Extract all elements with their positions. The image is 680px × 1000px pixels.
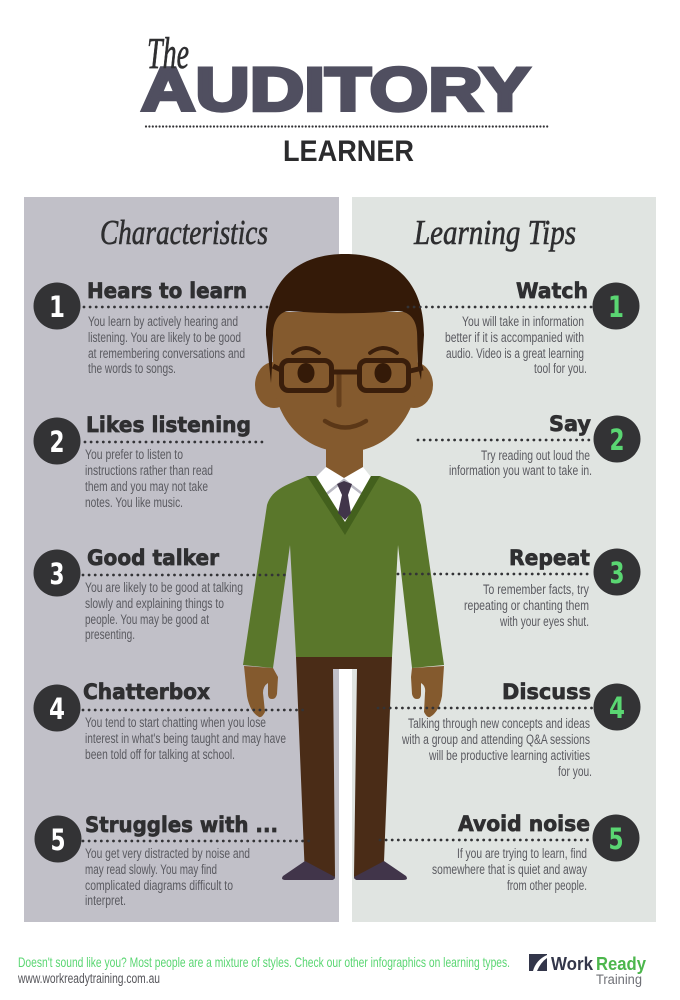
description: them and you may not take — [85, 479, 208, 494]
characteristic 2: likes listening — [34, 413, 262, 510]
description: You tend to start chatting when you lose — [85, 715, 266, 730]
heading: Good talker — [87, 546, 220, 570]
number badge 2 — [34, 418, 80, 464]
description: may read slowly. You may find — [85, 862, 217, 877]
characteristic 5: struggles with — [34, 813, 312, 908]
left ear — [255, 362, 293, 408]
heading: Say — [549, 412, 591, 436]
logo: Work Ready Training: Training — [596, 972, 642, 987]
heading: Chatterbox — [83, 680, 210, 704]
collar shadow — [324, 480, 365, 496]
number badge 3: 3 — [610, 556, 624, 590]
illustration: man with glasses — [243, 254, 444, 880]
neck — [326, 440, 363, 482]
title script word: The: The — [147, 29, 189, 78]
description: listening. You are likely to be good — [88, 330, 241, 345]
nose — [336, 374, 342, 405]
number badge 1: 1 — [608, 290, 624, 324]
number badge 4 — [34, 684, 80, 732]
number badge 3: 3 — [50, 557, 64, 591]
description: with a group and attending Q&A sessions — [401, 732, 590, 747]
footer website: www.workreadytraining.com.au — [17, 971, 160, 986]
description: presenting. — [85, 627, 135, 642]
characteristic 4: chatterbox — [34, 680, 306, 762]
description — [85, 580, 243, 642]
description: slowly and explaining things to — [85, 596, 224, 611]
heading: Struggles with ... — [85, 813, 278, 837]
number badge 5: 5 — [50, 823, 66, 857]
heading: Watch — [516, 279, 588, 303]
legs — [296, 657, 392, 880]
description: You are likely to be good at talking — [85, 580, 243, 595]
description: interest in what's being taught and may have — [85, 731, 286, 746]
description: information you want to take in. — [449, 463, 592, 478]
description: You learn by actively hearing and — [88, 314, 238, 329]
description: instructions rather than read — [85, 463, 213, 478]
description: better if it is accompanied with — [445, 330, 584, 345]
description: You will take in information — [462, 314, 584, 329]
description: at remembering conversations and — [88, 346, 245, 361]
tip 1: watch — [408, 279, 640, 376]
characteristic 1: hears to learn — [34, 279, 272, 376]
description — [85, 447, 213, 510]
title subword: LEARNER: LEARNER — [283, 135, 414, 168]
description: will be productive learning activities — [428, 748, 590, 763]
face — [273, 312, 418, 452]
title — [141, 29, 548, 168]
panel: learning tips background — [352, 197, 656, 922]
description: You get very distracted by noise and — [85, 846, 250, 861]
description: somewhere that is quiet and away — [432, 862, 587, 877]
description: from other people. — [507, 878, 587, 893]
glasses — [273, 360, 423, 390]
number badge 4: 4 — [609, 691, 625, 725]
logo: Work Ready Training: Ready — [596, 954, 646, 974]
tip 4: discuss — [378, 680, 640, 779]
number badge 1 — [592, 282, 640, 330]
heading: Likes listening — [86, 413, 251, 437]
left eye — [298, 363, 314, 383]
right shoe — [354, 861, 407, 880]
heading: Avoid noise — [458, 812, 590, 836]
tip 5: avoid noise — [380, 812, 640, 893]
description: interpret. — [85, 893, 126, 908]
right ear — [395, 362, 433, 408]
hair — [266, 254, 424, 383]
description — [445, 314, 587, 376]
description — [449, 448, 592, 478]
description: people. You may be good at — [85, 612, 209, 627]
description: repeating or chanting them — [464, 598, 589, 613]
number badge 5: 5 — [608, 822, 624, 856]
title main word: AUDITORY: AUDITORY — [141, 56, 530, 124]
number badge 5 — [34, 816, 82, 862]
description: Talking through new concepts and ideas — [408, 716, 590, 731]
description — [85, 715, 286, 762]
tip 2: say — [418, 412, 640, 478]
number badge 5 — [592, 814, 640, 862]
description — [432, 846, 587, 893]
number badge 1 — [34, 282, 80, 330]
characteristic 3: good talker — [34, 546, 288, 642]
description: tool for you. — [534, 361, 587, 376]
number badge 3 — [594, 548, 640, 596]
heading: Learning Tips: Learning Tips — [413, 213, 576, 252]
description: notes. You like music. — [85, 495, 183, 510]
heading: Discuss — [502, 680, 591, 704]
description: for you. — [558, 764, 592, 779]
right hand — [411, 666, 444, 717]
number badge 3 — [34, 550, 80, 596]
heading: Characteristics: Characteristics — [100, 213, 268, 252]
heading: Repeat — [509, 546, 590, 570]
heading: Hears to learn — [87, 279, 247, 303]
panel: characteristics background — [24, 197, 339, 922]
logo wordmark: Work — [551, 954, 594, 974]
logo: Work Ready Training — [529, 954, 646, 987]
description — [85, 846, 250, 908]
eyebrows — [293, 348, 397, 353]
right eye — [374, 363, 392, 383]
collar — [316, 467, 371, 525]
left shoe — [282, 861, 335, 880]
logo mark — [529, 954, 547, 971]
description — [464, 582, 589, 629]
sweater — [243, 476, 444, 668]
description: complicated diagrams difficult to — [85, 878, 233, 893]
description: Try reading out loud the — [481, 448, 590, 463]
description: with your eyes shut. — [499, 614, 589, 629]
description: If you are trying to learn, find — [457, 846, 587, 861]
description: You prefer to listen to — [85, 447, 183, 462]
left hand — [244, 666, 278, 717]
number badge 4: 4 — [49, 692, 65, 726]
sweater neckline — [307, 476, 380, 535]
description — [401, 716, 592, 779]
footer note: Doesn't sound like you? Most people are a mixture of styles. Check our other infographics on learning types. — [18, 954, 510, 970]
number badge 2: 2 — [610, 423, 624, 457]
description: the words to songs. — [88, 361, 176, 376]
number badge 2: 2 — [50, 425, 64, 459]
number badge 4 — [594, 684, 640, 730]
description: To remember facts, try — [483, 582, 589, 597]
smile — [325, 421, 366, 428]
description: been told off for talking at school. — [85, 747, 235, 762]
tip 3: repeat — [398, 546, 640, 629]
number badge 1: 1 — [49, 290, 65, 324]
description: audio. Video is a great learning — [446, 346, 584, 361]
number badge 2 — [594, 416, 640, 462]
tie — [337, 481, 352, 520]
description — [88, 314, 245, 376]
